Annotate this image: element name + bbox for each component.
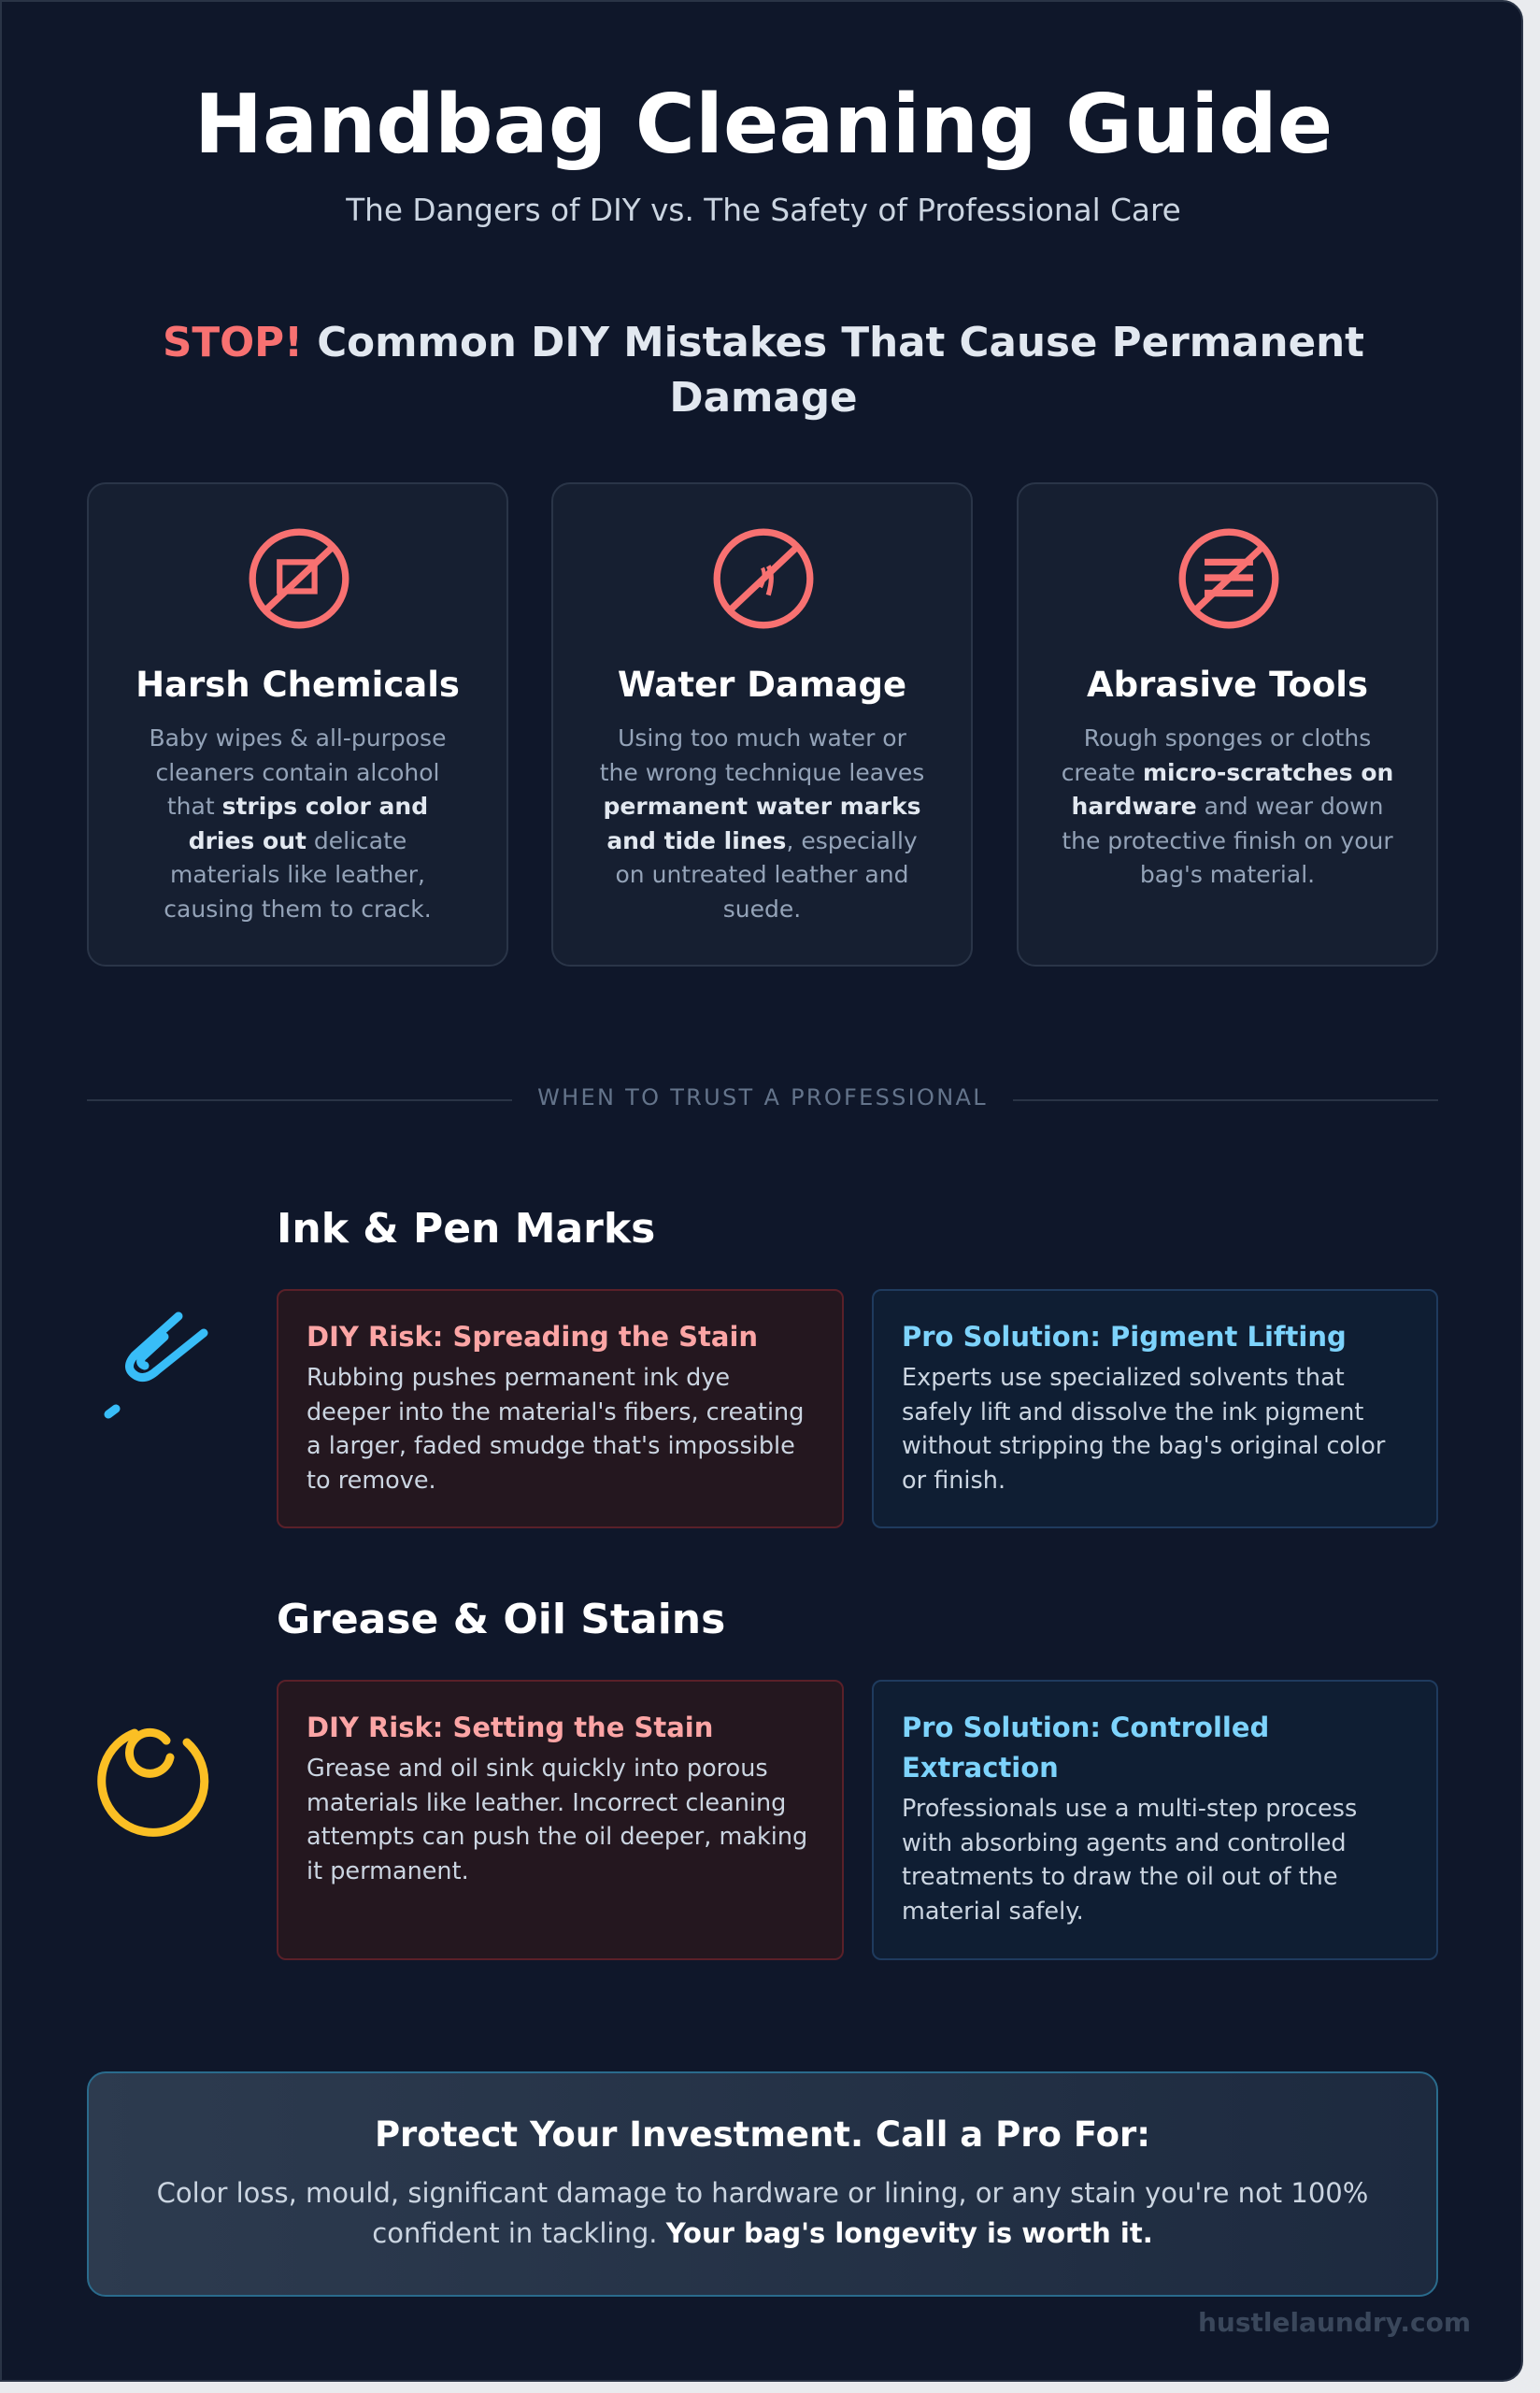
DIY risk: ink: DIY Risk: Spreading the Stain [307, 1321, 758, 1353]
footer: website: hustlelaundry.com [1198, 2307, 1471, 2338]
pro solution: grease: Professionals use a multi-step process with absorbing agents and controlled treatments to draw the oil out of the material safely. [902, 1795, 1357, 1926]
callout: call a pro: Protect Your Investment. Call a Pro For: [375, 2114, 1150, 2155]
heading: ink & pen marks: Ink & Pen Marks [277, 1205, 655, 1253]
pro solution: grease: Pro Solution: Controlled Extraction [902, 1712, 1269, 1784]
DIY risk: ink: Rubbing pushes permanent ink dye deeper into the material's fibers, creating a larger, faded smudge that's impossible to remove. [307, 1364, 804, 1494]
card: water damage: Using too much water or the wrong technique leaves permanent water marks and tide lines, especially on untreated leather and suede. [600, 724, 924, 922]
card: abrasive tools [1017, 482, 1438, 967]
callout: call a pro: Color loss, mould, significant damage to hardware or lining, or any stain you're not 100% confident in tackling. Your bag's longevity is worth it. [157, 2177, 1368, 2249]
icon: pen [105, 1312, 207, 1419]
icon: no chemicals [249, 529, 349, 628]
card: harsh chemicals [87, 482, 508, 967]
DIY risk: ink [277, 1289, 844, 1528]
card: harsh chemicals: Harsh Chemicals [135, 665, 460, 705]
pro solution: ink [872, 1289, 1438, 1528]
card: water damage [551, 482, 973, 967]
DIY risk: grease [277, 1680, 844, 1960]
DIY risk: grease: DIY Risk: Setting the Stain [307, 1712, 713, 1743]
card: abrasive tools: Abrasive Tools [1087, 665, 1368, 705]
icon: no abrasive [1179, 529, 1278, 628]
card: water damage: Water Damage [618, 665, 906, 705]
title: Handbag Cleaning Guide [194, 77, 1333, 172]
card: abrasive tools: Rough sponges or cloths create micro-scratches on hardware and wear down the protective finish on your bag's material. [1062, 724, 1393, 888]
pro solution: grease [872, 1680, 1438, 1960]
divider label: WHEN TO TRUST A PROFESSIONAL [537, 1084, 988, 1111]
DIY risk: grease: Grease and oil sink quickly into porous materials like leather. Incorrect cleaning attempts can push the oil deeper, making it permanent. [307, 1755, 807, 1884]
pro solution: ink: Experts use specialized solvents that safely lift and dissolve the ink pigment without stripping the bag's original color or finish. [902, 1364, 1385, 1494]
icon: no water [714, 529, 813, 628]
pro solution: ink: Pro Solution: Pigment Lifting [902, 1321, 1347, 1353]
section heading: DIY mistakes: STOP! Common DIY Mistakes That Cause Permanent Damage [163, 320, 1364, 422]
callout: call a pro [87, 2071, 1438, 2297]
subtitle: The Dangers of DIY vs. The Safety of Professional Care [346, 193, 1181, 228]
icon: oil drop [97, 1727, 209, 1837]
heading: grease & oil: Grease & Oil Stains [277, 1596, 725, 1643]
card: harsh chemicals: Baby wipes & all-purpose cleaners contain alcohol that strips color and dries out delicate materials like leather, causing them to crack. [150, 724, 446, 922]
